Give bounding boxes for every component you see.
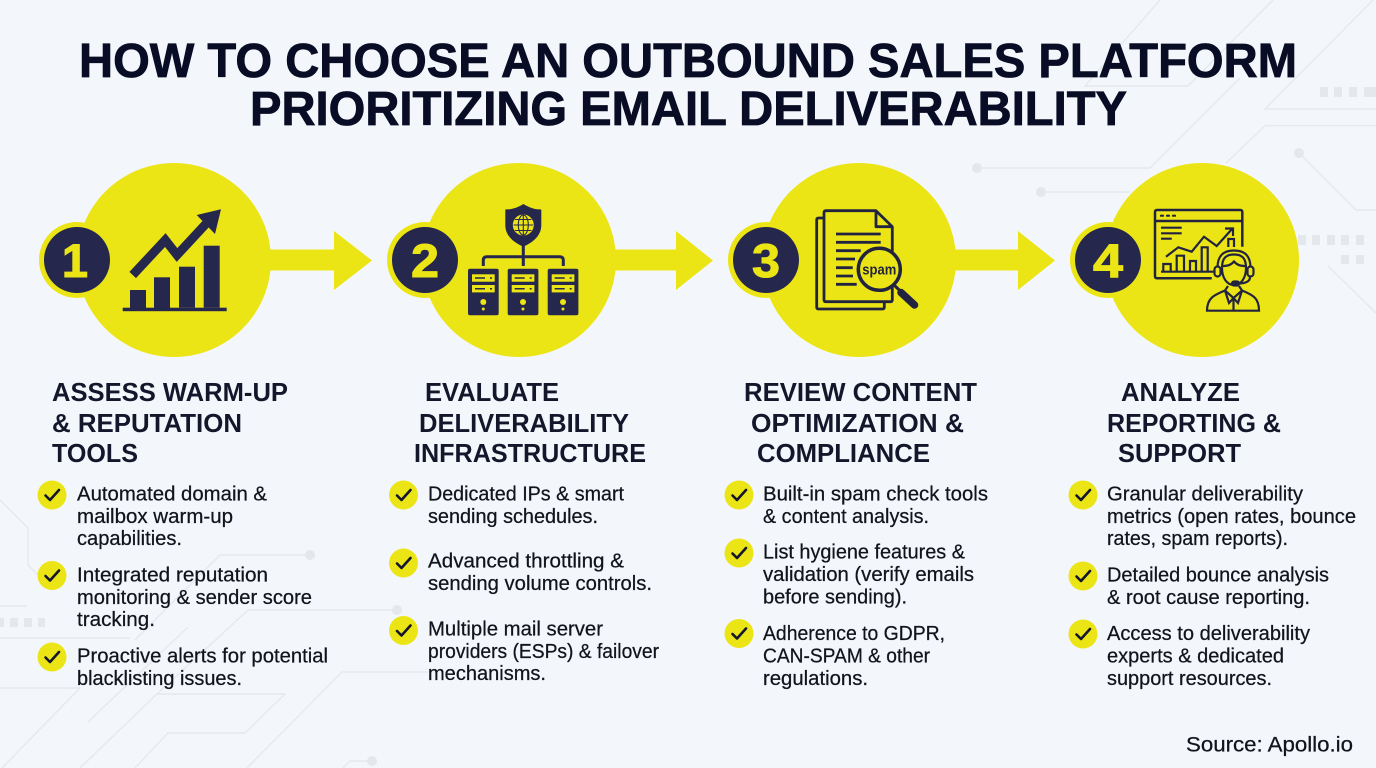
column 1 heading bbox=[52, 377, 288, 468]
column 4 checklist bbox=[1068, 480, 1356, 690]
item: granular metrics: Granular deliverability bbox=[1107, 484, 1303, 506]
column 2 heading: DELIVERABILITY bbox=[419, 408, 629, 438]
number badge 4: 4 bbox=[1093, 234, 1123, 287]
column 3 heading: REVIEW CONTENT bbox=[744, 377, 977, 407]
item: bounce analysis: Detailed bounce analysis bbox=[1107, 565, 1329, 587]
item: domain warm-up bbox=[38, 480, 268, 550]
arrow: step 1 to step 2 bbox=[265, 231, 372, 290]
item: regulations: Adherence to GDPR, bbox=[763, 623, 945, 645]
column 2 checklist bbox=[389, 480, 659, 685]
item: mail server providers: mechanisms. bbox=[428, 663, 546, 685]
icon: document with spam magnifier: spam bbox=[862, 262, 896, 278]
column 1 heading: TOOLS bbox=[52, 438, 138, 468]
item: deliverability experts bbox=[1068, 620, 1310, 690]
column 1 heading: & REPUTATION bbox=[52, 408, 242, 438]
item: deliverability experts: support resources. bbox=[1107, 668, 1272, 690]
item: regulations: regulations. bbox=[763, 668, 868, 690]
column 4 heading bbox=[1107, 377, 1281, 468]
title: PRIORITIZING EMAIL DELIVERABILITY bbox=[250, 83, 1127, 136]
item: granular metrics: rates, spam reports). bbox=[1107, 528, 1288, 550]
item: list hygiene: List hygiene features & bbox=[763, 542, 966, 564]
title: HOW TO CHOOSE AN OUTBOUND SALES PLATFORM bbox=[79, 35, 1297, 88]
step 4 medallion bbox=[1070, 163, 1299, 357]
arrow: step 2 to step 3 bbox=[610, 231, 713, 290]
number badge 1: 1 bbox=[62, 234, 88, 287]
arrow: step 3 to step 4 bbox=[950, 231, 1055, 290]
column 3 heading: OPTIMIZATION & bbox=[751, 408, 964, 438]
column 4 heading: SUPPORT bbox=[1118, 438, 1241, 468]
number badge 2: 2 bbox=[411, 234, 439, 287]
item: mail server providers: Multiple mail server bbox=[428, 619, 603, 641]
item: blacklisting alerts: Proactive alerts for potential bbox=[77, 646, 328, 668]
step 3 medallion bbox=[728, 163, 956, 357]
number badge 2 bbox=[387, 222, 463, 298]
item: throttling controls bbox=[389, 548, 652, 595]
item: domain warm-up: capabilities. bbox=[77, 528, 182, 550]
item: reputation monitoring: monitoring & sender score bbox=[77, 587, 312, 609]
icon: shield and servers bbox=[468, 204, 578, 315]
number badge 3: 3 bbox=[752, 234, 780, 287]
column 2 heading: INFRASTRUCTURE bbox=[414, 438, 646, 468]
step 2 medallion bbox=[387, 163, 616, 357]
column 4 heading: REPORTING & bbox=[1107, 408, 1281, 438]
column 3 heading bbox=[744, 377, 977, 468]
column 3 heading: COMPLIANCE bbox=[757, 438, 930, 468]
item: dedicated IPs: sending schedules. bbox=[428, 506, 598, 528]
item: mail server providers: providers (ESPs) & failover bbox=[428, 641, 659, 663]
item: granular metrics bbox=[1068, 480, 1356, 550]
item: mail server providers bbox=[389, 616, 659, 685]
column 2 heading: EVALUATE bbox=[425, 377, 559, 407]
item: list hygiene: validation (verify emails bbox=[763, 564, 974, 586]
server 2 bbox=[508, 269, 538, 315]
item: list hygiene bbox=[724, 538, 974, 608]
item: domain warm-up: mailbox warm-up bbox=[77, 506, 233, 528]
number badge 3 bbox=[728, 222, 804, 298]
step 1 medallion bbox=[39, 163, 271, 357]
item: throttling controls: Advanced throttling & bbox=[428, 551, 625, 573]
item: granular metrics: metrics (open rates, bounce bbox=[1107, 506, 1356, 528]
column 2 heading bbox=[414, 377, 646, 468]
item: throttling controls: sending volume controls. bbox=[428, 573, 652, 595]
source note: Source: Apollo.io bbox=[1186, 734, 1353, 757]
item: deliverability experts: experts & dedicated bbox=[1107, 646, 1284, 668]
item: bounce analysis: & root cause reporting. bbox=[1107, 587, 1310, 609]
item: reputation monitoring: Integrated reputation bbox=[77, 565, 268, 587]
item: blacklisting alerts bbox=[38, 642, 328, 690]
item: spam check tools: & content analysis. bbox=[763, 506, 929, 528]
column 3 checklist bbox=[724, 480, 988, 690]
item: reputation monitoring: tracking. bbox=[77, 609, 155, 631]
item: regulations bbox=[724, 619, 945, 690]
column 4 heading: ANALYZE bbox=[1121, 377, 1240, 407]
server 3 bbox=[548, 269, 578, 315]
column 1 heading: ASSESS WARM-UP bbox=[52, 377, 288, 407]
item: reputation monitoring bbox=[38, 561, 312, 631]
title bbox=[79, 35, 1297, 136]
item: dedicated IPs bbox=[389, 480, 624, 528]
item: domain warm-up: Automated domain & bbox=[77, 484, 268, 506]
item: list hygiene: before sending). bbox=[763, 586, 907, 608]
item: regulations: CAN-SPAM & other bbox=[763, 646, 930, 668]
server 1 bbox=[468, 269, 499, 315]
item: bounce analysis bbox=[1068, 562, 1329, 609]
icon: rising bar chart bbox=[123, 209, 227, 311]
item: spam check tools: Built-in spam check tools bbox=[763, 484, 988, 506]
icon: document with spam magnifier bbox=[817, 211, 916, 309]
item: blacklisting alerts: blacklisting issues. bbox=[77, 668, 242, 690]
item: deliverability experts: Access to deliverability bbox=[1107, 623, 1310, 645]
number badge 4 bbox=[1070, 222, 1146, 298]
item: spam check tools bbox=[724, 480, 988, 528]
column 1 checklist bbox=[38, 480, 328, 690]
number badge 1 bbox=[39, 222, 115, 298]
item: dedicated IPs: Dedicated IPs & smart bbox=[428, 484, 624, 506]
icon: dashboard and support agent bbox=[1155, 210, 1259, 311]
